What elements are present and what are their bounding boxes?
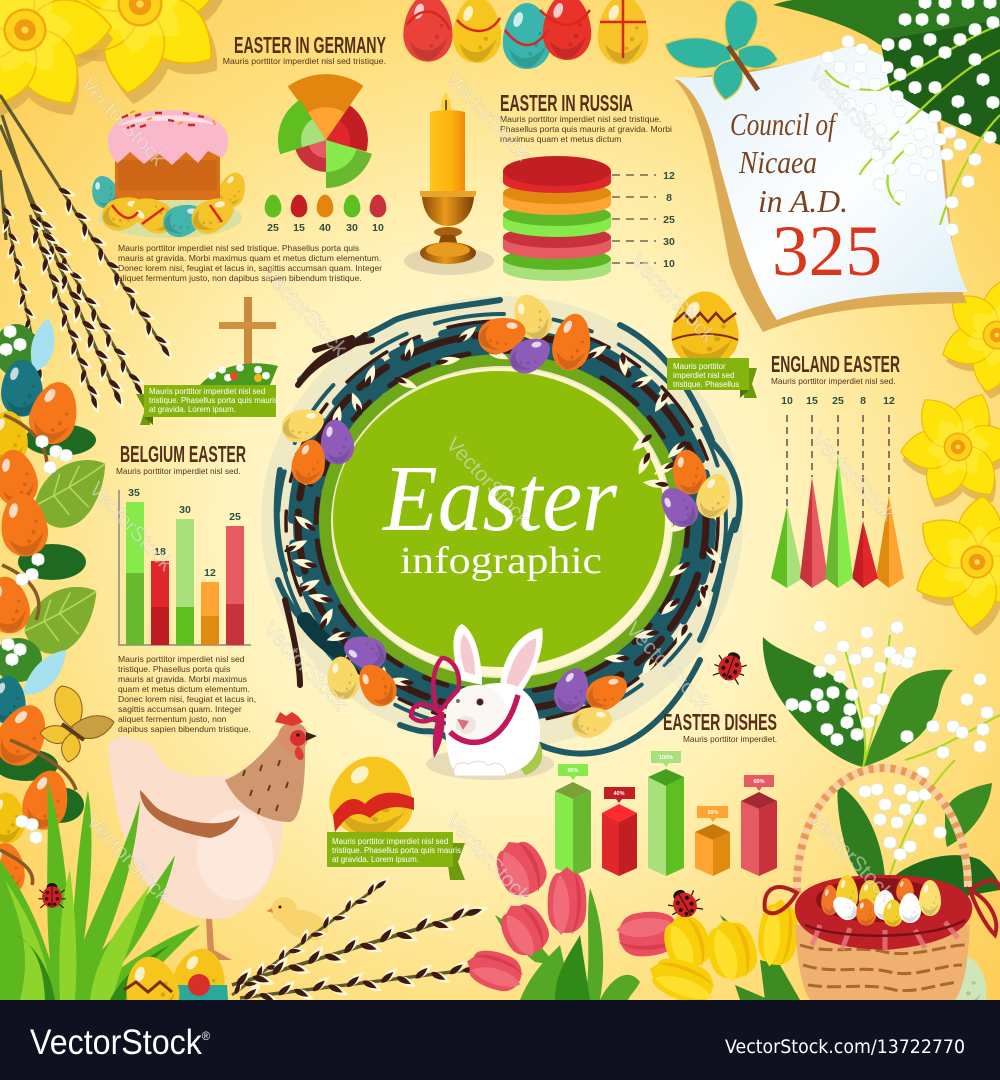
- chart leader lines and values: 12: [663, 170, 675, 182]
- grass with ladybug: [0, 780, 200, 1000]
- chart legend: egg markers with values: 15: [293, 222, 305, 234]
- body text: Mauris porttitor imperdiet nisl sed: [118, 654, 245, 664]
- chart legend: egg markers with values: 40: [319, 222, 331, 234]
- ladybugs: [663, 647, 750, 924]
- watermarks: [76, 63, 900, 908]
- footer bar: [0, 1000, 1000, 1080]
- body text: aliquet fermentum justo, non: [118, 714, 227, 724]
- lily of the valley: right: [763, 620, 1000, 897]
- cone chart values: 10: [781, 395, 793, 407]
- body text: sagittis accumsan quam. Integer: [118, 704, 242, 714]
- butterfly: brown and yellow: [40, 686, 114, 762]
- cone chart values: 12: [883, 395, 895, 407]
- stacked disc chart: [503, 156, 611, 281]
- cone chart: [771, 455, 904, 588]
- hen: [108, 712, 317, 960]
- left floral column: eggs, leaves and flowers: [0, 318, 110, 897]
- cone chart values: 8: [860, 395, 866, 407]
- subheading: Mauris porttitor imperdiet.: [683, 734, 777, 744]
- bar chart: 30: [179, 504, 191, 516]
- banner: at gravida. Lorem ipsum.: [332, 855, 419, 864]
- icon: easter cake with eggs: [87, 110, 251, 242]
- watermarks: VectorStock: [258, 618, 352, 716]
- basket handle: [797, 768, 968, 893]
- chick: [266, 897, 332, 946]
- icon: candle in holder: [404, 92, 494, 275]
- watermarks: VectorStock: [621, 618, 715, 716]
- watermarks: VectorStock: [81, 810, 175, 908]
- scroll text: [730, 106, 848, 219]
- value tags: 20%: [707, 810, 719, 816]
- watermarks: VectorStock: [441, 68, 535, 166]
- chart legend: egg markers with values: [265, 195, 386, 234]
- cross with flowers: [200, 297, 278, 385]
- butterfly: teal: [665, 0, 778, 100]
- willow branches: bottom: [226, 869, 492, 1012]
- banner: [667, 358, 757, 398]
- title: easter: Easter: [381, 447, 617, 551]
- golden egg with green banner: bottom: [325, 751, 465, 880]
- cone chart values: [781, 395, 895, 407]
- panel: belgium easter: [116, 441, 256, 734]
- footer url: VectorStock.com/13722770: [725, 1036, 965, 1058]
- red tulips: [462, 832, 683, 1000]
- willow branches: top left: [0, 95, 182, 417]
- body text: dapibus sapien bibendum tristique.: [118, 724, 251, 734]
- body text: tristique. Phasellus porta quis: [118, 664, 230, 674]
- body text: Donec lorem nisi, feugiat et lacus in, sagittis accumsan quam. Integer: [118, 263, 382, 273]
- plaid cloth with eggs: [795, 875, 972, 950]
- heading: easter in russia: EASTER IN RUSSIA: [500, 90, 633, 116]
- title: infographic: infographic: [400, 540, 602, 582]
- body text: mauris at gravida. Morbi maximus quam et metus dictum elementum.: [118, 253, 381, 263]
- yellow tulips: [643, 897, 800, 1010]
- body text: quam et metus dictum elementum.: [118, 684, 250, 694]
- banner: Mauris porttitor imperdiet nisl sed: [332, 837, 448, 846]
- bar chart: 35: [128, 487, 140, 499]
- chart leader lines and values: 25: [663, 214, 675, 226]
- subheading: Mauris porttitor imperdiet nisl sed.: [116, 466, 240, 476]
- wreath: decorated eggs: [277, 288, 736, 741]
- heading: england easter: ENGLAND EASTER: [771, 351, 900, 377]
- bunny with bow: [411, 624, 554, 780]
- icon: egg with red band: [325, 751, 419, 843]
- scroll text: Nicaea: [738, 144, 817, 180]
- body text: Mauris porttitor imperdiet nisl sed tristique. Phasellus porta quis: [118, 243, 359, 253]
- chart leader lines and values: [612, 170, 675, 270]
- panel: easter dishes: [555, 709, 777, 876]
- value tags: 40%: [613, 791, 625, 797]
- body text: [118, 654, 256, 734]
- wreath: pale shadow: [297, 332, 707, 712]
- body text: mauris at gravida. Morbi maximus: [118, 674, 247, 684]
- daffodils: right side: [877, 268, 1000, 642]
- chart legend: egg markers with values: 25: [267, 222, 279, 234]
- panel: easter in russia: [500, 90, 675, 281]
- banner: Mauris porttitor: [673, 362, 726, 371]
- footer logo: ®: [202, 1029, 210, 1043]
- panel: easter in germany: [118, 32, 386, 283]
- basket body: [795, 925, 970, 1000]
- subheading text: maximus quam et metus dictum: [500, 134, 621, 144]
- ground eggs: [121, 944, 230, 1024]
- chart leader lines and values: 8: [666, 192, 672, 204]
- heading: easter in germany: EASTER IN GERMANY: [234, 32, 386, 58]
- polar area chart: [278, 74, 372, 188]
- body text: aliquet fermentum justo, non dapibus sapien bibendum tristique.: [118, 273, 362, 283]
- easter basket: [765, 768, 1000, 1016]
- watermarks: VectorStock: [258, 263, 352, 361]
- banner: tristique. Phasellus: [673, 380, 739, 389]
- watermarks: VectorStock: [441, 810, 535, 908]
- cone chart values: 25: [832, 395, 844, 407]
- watermarks: VectorStock: [626, 250, 720, 348]
- heading: belgium easter: BELGIUM EASTER: [120, 441, 246, 467]
- year 325: 325: [772, 211, 882, 291]
- scroll shadow: [675, 60, 967, 332]
- body text: Donec lorem nisi, feugiat et lacus in,: [118, 694, 256, 704]
- watermarks: VectorStock: [806, 428, 900, 526]
- 3d bar chart: [555, 769, 777, 876]
- green banner: cross note: [136, 385, 278, 425]
- golden egg with green banner: [667, 292, 757, 398]
- basket bows: [765, 881, 1000, 935]
- icon: golden egg: [671, 292, 739, 366]
- chart leader lines and values: 30: [663, 236, 675, 248]
- watermarks: VectorStock: [804, 63, 898, 161]
- subheading text: [500, 114, 672, 144]
- value tags: 100%: [659, 755, 673, 761]
- green banner: cross note: tristique. Phasellus porta quis mauris: [149, 396, 278, 405]
- wreath with title: [277, 288, 740, 780]
- watermarks: VectorStock: [84, 478, 178, 576]
- cone chart values: 15: [806, 395, 818, 407]
- banner: [327, 832, 465, 880]
- decorative egg row at the top: [403, 0, 648, 69]
- bar chart: 25: [229, 511, 241, 523]
- green banner: cross note: at gravida. Lorem ipsum.: [149, 405, 236, 414]
- subheading: Mauris porttitor imperdiet nisl sed.: [771, 376, 896, 386]
- lily of the valley: top right: [773, 0, 1000, 236]
- heading: easter dishes: EASTER DISHES: [663, 709, 777, 735]
- watermarks: VectorStock: [76, 73, 170, 171]
- bar chart: 18: [154, 546, 166, 558]
- footer logo: VectorStock: [30, 1023, 217, 1062]
- chart leader lines and values: 10: [663, 258, 675, 270]
- scroll text: Council of: [730, 106, 838, 142]
- banner: tristique. Phasellus porta quis mauris: [332, 846, 461, 855]
- chart legend: egg markers with values: 10: [372, 222, 384, 234]
- bar chart: 12: [204, 567, 216, 579]
- value tags: 60%: [753, 779, 765, 785]
- value tags: 80%: [567, 768, 579, 774]
- subheading text: Mauris porttitor imperdiet nisl sed tristique.: [500, 114, 661, 124]
- watermarks: VectorStock: [804, 808, 898, 906]
- daffodils: top left: [0, 0, 252, 160]
- bar chart: [119, 487, 251, 645]
- banner: imperdiet nisl sed: [673, 371, 734, 380]
- chart legend: egg markers with values: 30: [346, 222, 358, 234]
- value tags: [558, 751, 774, 822]
- subheading text: Phasellus porta quis mauris at gravida. Morbi: [500, 124, 672, 134]
- scroll sheet: [673, 46, 968, 320]
- green banner: cross note: Mauris porttitor imperdiet nisl sed: [149, 387, 265, 396]
- subheading: Mauris porttitor imperdiet nisl sed tristique.: [223, 56, 386, 66]
- cone chart guide lines: [787, 415, 889, 521]
- teal egg: [929, 954, 987, 1016]
- panel: england easter: [771, 351, 904, 588]
- scroll text: in A.D.: [758, 183, 848, 219]
- watermarks: VectorStock: [441, 433, 535, 531]
- paper scroll: council of nicaea: [673, 46, 968, 332]
- wreath: willow catkins: [282, 324, 725, 690]
- wreath: teal twigs: [277, 300, 740, 754]
- body text: [118, 243, 382, 283]
- green title disc: [333, 371, 665, 667]
